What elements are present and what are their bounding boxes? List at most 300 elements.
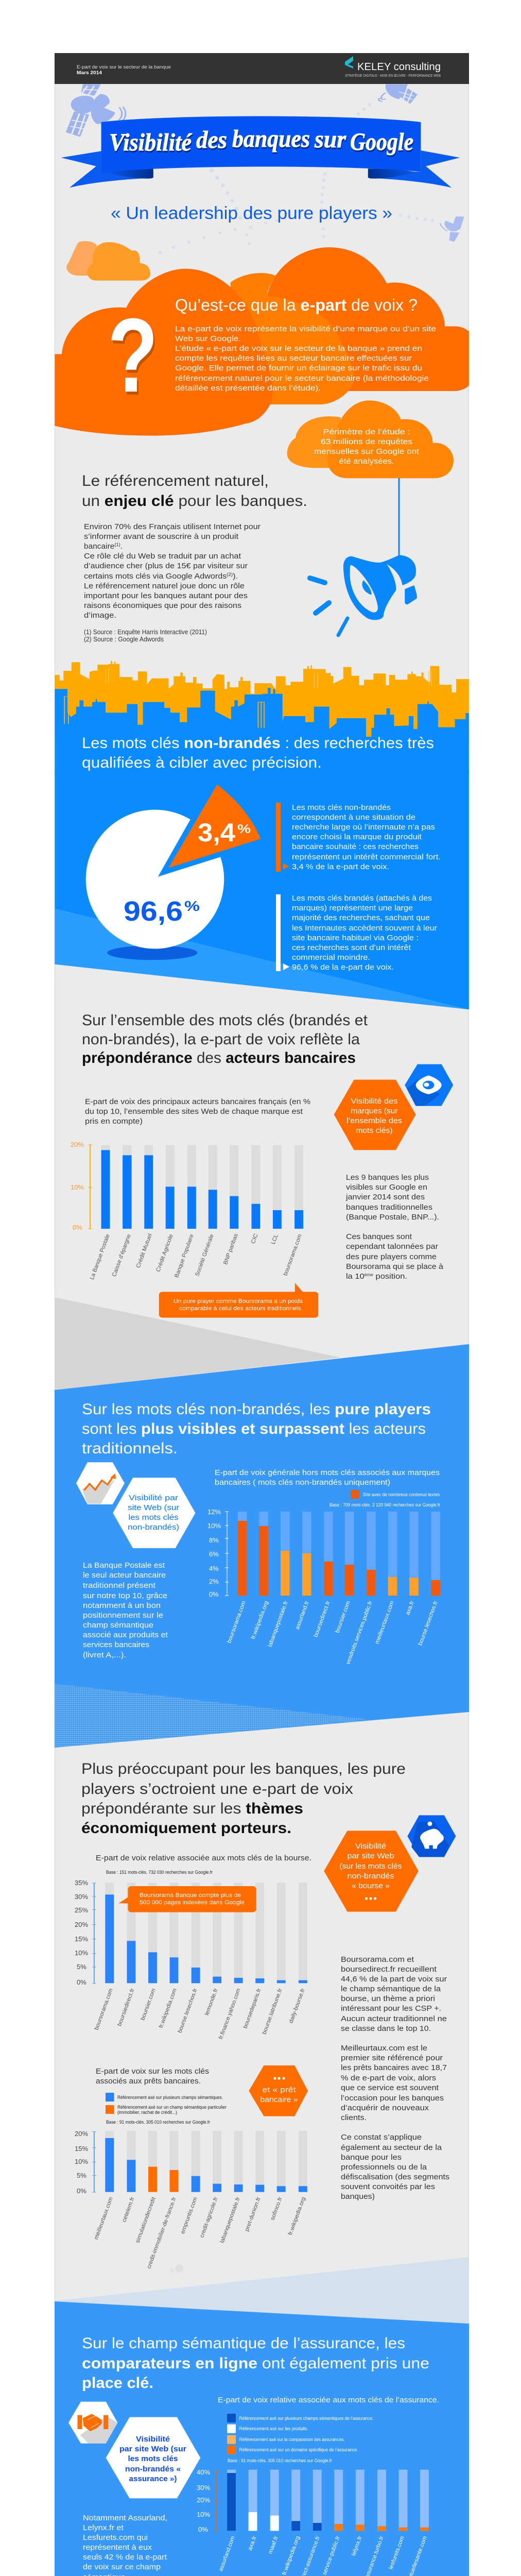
chart 5 legend: Référencement axé sur un domaine spécifique de l’assurance. [239, 2447, 358, 2453]
note: non-brandés [276, 803, 441, 872]
scope cloud: mensuelles sur Google ont [314, 447, 420, 456]
text: Boursorama et Meilleurtaux: boursedirect.fr recueillent [341, 1965, 437, 1974]
bar chart: bourse: fr.finance.yahoo.com [218, 1988, 242, 2040]
text: 9 banques: la 10 [346, 1272, 363, 1281]
chart 2 description: E-part de voix générale hors mots clés associés aux marques [215, 1468, 440, 1477]
bar chart: assurance: 10% [197, 2511, 210, 2518]
text: référencement naturel: ). [233, 572, 238, 581]
chart 4 description and legend: Base : 91 mots-clés. 305 010 recherches sur Google.fr [106, 2120, 210, 2125]
chart 5 legend: Référencement axé sur plusieurs champs sémantiques de l’assurance. [239, 2416, 374, 2421]
blue background [55, 2301, 469, 2576]
note: non-brandés: représentent un intérêt commercial fort. [292, 853, 441, 861]
text: Boursorama et Meilleurtaux: intéressant pour les CSP +. [341, 2004, 441, 2013]
bar chart: assurance: maaf.fr [267, 2535, 280, 2555]
hexagon: visibilité assurance: non-brandés « [125, 2465, 181, 2473]
callout: pages indexées: Boursorama Banque compte plus de [140, 1892, 241, 1899]
text: 9 banques: banques traditionnelles [346, 1203, 432, 1212]
text: référencement naturel: Ce rôle clé du Web se traduit par un achat [84, 552, 241, 561]
text: Boursorama et Meilleurtaux: Boursorama.com et [341, 1955, 414, 1964]
title text: banques [232, 125, 310, 152]
Keley logo: KELEY consulting [357, 61, 441, 73]
Keley logo: STRATÉGIE DIGITALE - MISE EN ŒUVRE - PERFORMANCE WEB [345, 73, 441, 78]
bar chart: prêts bancaires: meilleurtaux.com [93, 2196, 114, 2241]
bar chart: acteurs bancaires [71, 1141, 303, 1280]
bar chart: bourse [75, 1879, 307, 2040]
bar chart: bourse: 30% [75, 1893, 88, 1901]
bar chart: bourse: 35% [75, 1879, 88, 1887]
city skyline [55, 661, 469, 774]
text: Boursorama et Meilleurtaux: se classe dans le top 10. [341, 2024, 431, 2033]
text: référencement naturel: . [120, 542, 123, 551]
hexagon: visibilité par site: les mots clés [129, 1513, 178, 1522]
text: Boursorama et Meilleurtaux: professionnels ou de la [341, 2163, 427, 2172]
hexagon: visibilité assurance: assurance ») [129, 2475, 177, 2483]
pie chart [86, 785, 260, 960]
bar chart: assurance: lesfurets.com [388, 2535, 406, 2570]
callout: pages indexées: 500 000 pages indexées dans Google [140, 1900, 245, 1906]
bar chart: bourse: daily-bourse.fr [288, 1988, 306, 2024]
cloud body text: compte les requêtes liées au secteur bancaire effectuées sur [175, 354, 412, 363]
cloud body text: détaillée est présentée dans l’étude). [175, 384, 321, 393]
note: non-brandés: encore choisi la marque du produit [292, 833, 422, 841]
ribbon tails [61, 150, 460, 188]
bar chart: prêts bancaires: empruntis.com [180, 2196, 199, 2235]
bar chart: bourse: boursedeparis.fr [242, 1988, 263, 2029]
heading: prépondérance des acteurs bancaires: non-brandés), la e-part de voix reflète la [82, 1031, 360, 1048]
chart 2 legend: Base : 709 mots-clés. 2 120 940 recherches sur Google.fr [329, 1502, 440, 1508]
chart 4 description and legend: E-part de voix sur les mots clés [96, 2067, 209, 2076]
text: Assurland: Lelynx.fr et [83, 2523, 124, 2532]
cloud back lobes [55, 247, 469, 436]
text: La Banque Postale: sur notre top 10, grâce [83, 1591, 167, 1600]
text: La Banque Postale: (livret A,...). [83, 1651, 126, 1659]
heading: thèmes économiquement porteurs: prépondérante sur les thèmes [81, 1800, 303, 1817]
hexagon: visibilité par site: non-brandés) [128, 1523, 179, 1532]
text: La Banque Postale: La Banque Postale est [83, 1561, 165, 1570]
title text: des [196, 126, 227, 154]
bar chart: acteurs bancaires: Société Générale [194, 1233, 215, 1277]
cloud heading: Qu’est-ce que la e-part de voix ? [175, 296, 418, 314]
text: Boursorama et Meilleurtaux: l’occasion pour les banques [341, 2094, 444, 2103]
bar chart: prêts bancaires: cetelem.fr [121, 2196, 136, 2223]
slice label 3,4% [198, 818, 251, 847]
text: référencement naturel [84, 522, 260, 643]
bar chart: bourse: fr.wikipedia.com [158, 1988, 178, 2029]
chart 4 description and legend: (immobilier, rachat de crédit...) [117, 2110, 177, 2115]
bar chart: prêts bancaires: sofinco.fr [269, 2196, 284, 2221]
text: Boursorama et Meilleurtaux: les prêts bancaires avec 18,7 [341, 2063, 447, 2072]
chart 1 description [85, 1097, 310, 1126]
bar chart: acteurs bancaires: Banque Populaire [173, 1233, 195, 1279]
text: 9 banques: janvier 2014 sont des [345, 1193, 425, 1201]
bar chart: assurance: 40% [197, 2468, 210, 2476]
bar chart: prêts bancaires: labanquepostale.fr [219, 2196, 241, 2244]
icon: eye hexagon [405, 1064, 453, 1106]
title text: Visibilité [109, 129, 193, 156]
bar chart: e-part non-brandés: axa.fr [405, 1600, 415, 1616]
text: 9 banques: cependant talonnées par [346, 1242, 438, 1251]
text: Boursorama et Meilleurtaux: également au secteur de la [341, 2143, 442, 2152]
text: référencement naturel: bancaire [84, 542, 114, 551]
icon: handshake hexagon [68, 2402, 117, 2444]
text: 9 banques: (Banque Postale, BNP...). [346, 1213, 439, 1222]
note: brandés: marques) représentent une large [292, 904, 413, 912]
bar chart: assurance: 0% [198, 2526, 208, 2533]
note: brandés: site bancaire habituel via Google : [292, 934, 419, 942]
hexagon: visibilité assurance [106, 2417, 200, 2498]
section heading [82, 2335, 429, 2392]
hexagon: prêt bancaire [249, 2065, 308, 2116]
icon: growth hexagon [76, 1462, 125, 1504]
hexagon: prêt bancaire: bancaire » [260, 2095, 298, 2104]
blue background [55, 771, 469, 1009]
icon: satellite right [440, 216, 464, 242]
bar chart: e-part non-brandés [207, 1508, 440, 1665]
section heading: traditionnels. [82, 1440, 178, 1457]
bar chart: e-part non-brandés: 8% [209, 1536, 219, 1544]
text: Boursorama et Meilleurtaux: souvent convoités par les [341, 2182, 435, 2191]
bar chart: acteurs bancaires: 0% [73, 1224, 82, 1231]
text: 9 banques: des pure players comme [346, 1252, 437, 1261]
hexagon: visibilité par site [113, 1478, 195, 1548]
text: référencement naturel: raisons économiques que pour des raisons [84, 601, 241, 610]
header bar [55, 53, 469, 84]
bar chart: e-part non-brandés: 10% [207, 1522, 221, 1530]
hexagon: visibilité des marques [334, 1080, 416, 1150]
text: référencement naturel: Le référencement naturel joue donc un rôle [84, 582, 245, 590]
scope cloud: été analysées. [339, 457, 394, 466]
hexagon: visibilité bourse [324, 1831, 419, 1912]
chart 2 description: bancaires ( mots clés non-brandés uniquement) [215, 1478, 390, 1487]
bar chart: e-part non-brandés: 6% [209, 1550, 219, 1558]
heading: référencement naturel [82, 472, 307, 510]
hexagon: visibilité des marques: Visibilité des [351, 1097, 397, 1106]
hexagon: visibilité bourse: Visibilité [355, 1842, 386, 1851]
hexagon: visibilité des marques: marques (sur [351, 1107, 398, 1115]
hexagon: visibilité assurance: par site Web (sur [119, 2445, 186, 2453]
slice label 96,6%: 96,6 [124, 896, 183, 927]
hexagon: visibilité par site: Visibilité par [129, 1494, 178, 1502]
hexagon: visibilité assurance: les mots clés [128, 2454, 178, 2463]
hexagon: visibilité des marques: l’ensemble des [346, 1116, 402, 1125]
note: non-brandés: 3,4 % de la e-part de voix. [292, 862, 389, 871]
text: 9 banques: visibles sur Google en [346, 1183, 427, 1192]
text: Boursorama et Meilleurtaux: premier site référencé pour [341, 2054, 443, 2062]
bar chart: assurance: lelynx.fr [351, 2535, 363, 2557]
slice label 96,6%: % [184, 898, 200, 914]
text: Assurland: Lesfurets.com qui [83, 2533, 148, 2542]
bar chart: bourse: boursorama.com [93, 1988, 114, 2031]
bar chart: e-part non-brandés: fr.wikipedia.org [250, 1600, 270, 1640]
ribbon band [101, 116, 421, 173]
text: La Banque Postale: champ sémantique [83, 1621, 153, 1630]
heading: référencement naturel: un enjeu clé pour les banques. [82, 493, 307, 510]
bar chart: bourse: bourse.lesechos.fr [177, 1988, 199, 2034]
text: Boursorama et Meilleurtaux [341, 1955, 449, 2201]
text: référencement naturel: d’image. [84, 611, 116, 620]
pale blue transition [55, 2257, 469, 2324]
icon: question mark: ? [108, 297, 158, 414]
scope cloud: 63 millions de requêtes [321, 437, 412, 446]
chart 4 description and legend [96, 2067, 227, 2125]
scope cloud: Périmètre de l’étude : [323, 428, 410, 436]
icon: piggy bank hexagon [407, 1815, 456, 1857]
note: brandés: les Internautes accèdent souvent à leur [292, 924, 437, 933]
chart 5 description: E-part de voix relative associée aux mots clés de l’assurance. [218, 2396, 439, 2404]
bar chart: bourse: boursier.com [140, 1988, 157, 2021]
bar chart: bourse: bourse.latribune.fr [261, 1988, 284, 2035]
bar chart: prêts bancaires: credit-immobilier-de-france.fr [146, 2196, 178, 2269]
small background clouds [66, 241, 150, 281]
bar chart: assurance: assurland.com [218, 2535, 236, 2572]
bar chart: bourse: 25% [75, 1906, 88, 1914]
chart 2 legend: Site avec de nombreux contenus textes [363, 1492, 440, 1498]
chart 2 description [215, 1468, 440, 1487]
text: Boursorama et Meilleurtaux: Ce constat s’applique [341, 2133, 422, 2142]
text: référencement naturel: Environ 70% des Français utilisent Internet pour [84, 522, 260, 531]
text: La Banque Postale: positionnement sur le [83, 1611, 163, 1620]
chart 1 description: du top 10, l’ensemble des sites Web de chaque marque est [85, 1107, 303, 1116]
heading: thèmes économiquement porteurs: économiquement porteurs. [81, 1820, 291, 1837]
text: 9 banques [345, 1173, 444, 1281]
chart 5 legend [227, 2414, 374, 2464]
callout: Boursorama: comparable à celui des acteurs traditionnels. [179, 1306, 303, 1312]
text: Boursorama et Meilleurtaux: que ce service est souvent [341, 2083, 439, 2092]
bar chart: acteurs bancaires: CIC [250, 1233, 259, 1245]
text: Boursorama et Meilleurtaux: 44,6 % de la part de voix sur [341, 1975, 447, 1984]
callout: Boursorama: Un pure player comme Boursorama a un poids [173, 1298, 303, 1304]
header study label: Mars 2014 [77, 70, 102, 76]
section heading: Les mots clés non-brandés : des recherches très [82, 735, 434, 752]
chart 3 description: Base : 151 mots-clés. 732 030 recherches sur Google.fr [106, 1870, 213, 1875]
bar chart: assurance: axa.fr [247, 2535, 258, 2551]
bar chart: prêts bancaires: 0% [77, 2187, 86, 2195]
text: Assurland: représentent à eux [83, 2543, 152, 2552]
slice label 3,4%: 3,4 [198, 818, 235, 847]
bar chart: bourse: 0% [77, 1978, 86, 1986]
heading: prépondérance des acteurs bancaires [82, 1012, 368, 1066]
bar chart: acteurs bancaires: Crédit Agricole [155, 1233, 175, 1273]
subtitle: « Un leadership des pure players » [111, 204, 392, 223]
text: référencement naturel: certains mots clés via Google Adwords [84, 572, 217, 581]
cloud body text [175, 325, 436, 393]
title text: sur [314, 126, 346, 153]
bar chart: assurance: 30% [197, 2484, 210, 2492]
cloud body text: La e-part de voix représente la visibilité d’une marque ou d’un site [175, 325, 436, 333]
text: 9 banques: ème [364, 1273, 374, 1277]
text: Boursorama et Meilleurtaux: d’acquérir de nouveaux [341, 2104, 429, 2112]
chart 1 description: E-part de voix des principaux acteurs bancaires français (en % [85, 1097, 310, 1106]
text: référencement naturel: important pour les banques autant pour des [84, 591, 248, 600]
section: assurance [55, 2301, 469, 2576]
section: pure players [55, 1344, 469, 1748]
e-part cloud [55, 247, 469, 436]
note: brandés: majorité des recherches, sachant que [292, 913, 430, 922]
bar chart: e-part non-brandés: boursier.com [334, 1600, 352, 1634]
text: 9 banques: position. [373, 1272, 407, 1281]
chart 1 description: pris en compte) [85, 1117, 143, 1126]
chart 4 description and legend: Référencement axé sur plusieurs champs sémantiques. [117, 2095, 223, 2100]
bar chart: e-part non-brandés: vosdroits.services.public.fr [345, 1600, 374, 1665]
section: mots clés non-brandés [55, 735, 469, 1009]
bar chart: bourse: 5% [77, 1963, 86, 1971]
bar chart: acteurs bancaires: Crédit Mutuel [135, 1233, 153, 1269]
chart 5 legend: Base : 91 mots-clés. 305 010 recherches sur Google.fr [228, 2458, 332, 2464]
hexagon: visibilité bourse: non-brandés [347, 1872, 394, 1880]
chart 5 legend: Référencement axé sur la comparaison des assurances. [239, 2437, 345, 2443]
text: Boursorama et Meilleurtaux: banques) [341, 2192, 375, 2201]
text: La Banque Postale [83, 1561, 168, 1659]
scope cloud [287, 400, 454, 478]
text: Assurland: de voix sur ce champ [83, 2563, 161, 2571]
section heading: Sur le champ sémantique de l’assurance, les [82, 2335, 405, 2352]
Keley logo [345, 56, 441, 78]
hexagon: visibilité bourse: « bourse » [352, 1882, 390, 1890]
note: brandés [276, 894, 437, 972]
hexagon: visibilité bourse: (sur les mots clés [340, 1862, 402, 1871]
text: La Banque Postale: associé aux produits et [83, 1631, 168, 1639]
dotted satellite links [159, 103, 434, 254]
bar chart: acteurs bancaires: Caisse d’épargne [111, 1233, 132, 1278]
heading: thèmes économiquement porteurs: players s’octroient une e-part de voix [81, 1781, 353, 1798]
heading: thèmes économiquement porteurs [81, 1760, 406, 1837]
bar chart: e-part non-brandés: 0% [209, 1590, 219, 1598]
text: Assurland: seuls 42 % de la e-part [83, 2553, 167, 2562]
bar chart: e-part non-brandés: meilleurtaux.com [374, 1600, 395, 1645]
text: Boursorama et Meilleurtaux: clients. [341, 2113, 367, 2122]
bar chart: prêts bancaires: 20% [75, 2130, 88, 2138]
bar chart: e-part non-brandés: boursorama.com [226, 1600, 247, 1644]
bar chart: e-part non-brandés: 2% [209, 1578, 219, 1585]
callout: Boursorama [159, 1283, 318, 1318]
note: brandés: ces recherches sont d’un intérêt [292, 943, 411, 952]
bar chart: prêts bancaires: 15% [75, 2145, 88, 2153]
bar chart: acteurs bancaires: 10% [71, 1183, 84, 1191]
heading: référencement naturel: Le référencement naturel, [82, 472, 269, 489]
note: brandés: commercial moindre. [292, 953, 370, 962]
hexagon: prêt bancaire: et « prêt [263, 2086, 296, 2094]
header study label [77, 64, 171, 76]
note: non-brandés: Les mots clés non-brandés [292, 803, 391, 812]
text: La Banque Postale: services bancaires [83, 1640, 149, 1649]
cloud main lobe [55, 269, 273, 436]
bar chart: e-part non-brandés: 12% [207, 1508, 221, 1516]
bar chart: bourse: 15% [75, 1935, 88, 1943]
text: La Banque Postale: traditionnel présent [83, 1581, 156, 1590]
chart 4 description and legend: associés aux prêts bancaires. [96, 2077, 201, 2086]
text: 9 banques: Boursorama qui se place à [346, 1262, 444, 1271]
bar chart: bourse: lemonde.fr [204, 1988, 219, 2016]
bar chart: e-part non-brandés: labanquepostale.fr [267, 1600, 289, 1648]
text: Assurland [83, 2514, 167, 2576]
text: Boursorama et Meilleurtaux: Aucun acteur traditionnel ne [341, 2014, 447, 2023]
bar chart: assurance [197, 2468, 429, 2576]
bar chart: prêts bancaires: fr.wikipedia.org [287, 2196, 307, 2236]
section heading: Sur les mots clés non-brandés, les pure players [82, 1401, 431, 1418]
heading: prépondérance des acteurs bancaires: prépondérance des acteurs bancaires [82, 1049, 356, 1066]
cloud body text: Web sur Google. [175, 334, 241, 343]
bar chart: acteurs bancaires: BNP paribas [222, 1232, 239, 1265]
callout: pages indexées [118, 1886, 256, 1912]
bar chart: prêts bancaires: 5% [77, 2172, 86, 2179]
bar chart: assurance: 20% [197, 2496, 210, 2504]
title ribbon [61, 116, 460, 188]
section heading: qualifiées à cibler avec précision. [82, 754, 322, 771]
text: Boursorama et Meilleurtaux: le champ sémantique de la [341, 1985, 441, 1993]
cloud body text: référencement naturel pour le secteur bancaire (la méthodologie [175, 374, 429, 383]
text: référencement naturel: (1) [114, 542, 120, 547]
section heading: sont les plus visibles et surpassent les acteurs [82, 1420, 426, 1437]
bar chart: bourse: boursiedirect.fr [116, 1988, 136, 2027]
chart 3 description: E-part de voix relative associée aux mots clés de la bourse. [96, 1854, 311, 1862]
bar chart: e-part non-brandés: assurland.fr [294, 1600, 310, 1631]
note: brandés: Les mots clés brandés (attachés à des [292, 894, 432, 903]
icon: satellite top right [378, 84, 418, 104]
grey transition triangle [55, 1297, 341, 1390]
cloud body text: L’étude « e-part de voix sur le secteur de la banque » prend en [175, 344, 422, 353]
hexagon: visibilité assurance: Visibilité [136, 2435, 170, 2444]
text: La Banque Postale: le seul acteur bancaire [83, 1571, 166, 1580]
bar chart: e-part non-brandés: bourse.lesechos.fr [417, 1600, 439, 1647]
bar chart: acteurs bancaires: LCL [270, 1233, 280, 1245]
heading: prépondérance des acteurs bancaires: Sur l’ensemble des mots clés (brandés et [82, 1012, 368, 1029]
hexagon: visibilité bourse: par site Web [347, 1852, 394, 1860]
hexagon: visibilité des marques: mots clés) [356, 1126, 393, 1135]
chart 3 description [96, 1854, 311, 1875]
bar chart: prêts bancaires: simulationdecredit [134, 2196, 157, 2244]
text: référencement naturel: s’informer avant de souscrire à un produit [84, 532, 239, 541]
text: Boursorama et Meilleurtaux: défiscalisation (des segments [341, 2173, 449, 2181]
text: Assurland: Notamment Assurland, [83, 2514, 167, 2522]
section heading: place clé. [82, 2375, 153, 2392]
text: Boursorama et Meilleurtaux: Meilleurtaux.com est le [341, 2044, 427, 2053]
note: non-brandés: bancaire souhaité : ces recherches [292, 842, 419, 851]
icon: satellite top left [66, 84, 126, 137]
bar chart: bourse: 20% [75, 1921, 88, 1928]
title text [109, 125, 413, 156]
text: référencement naturel: (2) Source : Google Adwords [84, 636, 164, 643]
text: référencement naturel: d’audience cher (plus de 15€ par visiteur sur [84, 562, 248, 570]
text: 9 banques: Ces banques sont [346, 1232, 412, 1241]
chart 4 description and legend: Référencement axé sur un champ sémantique particulier [117, 2105, 227, 2110]
note: non-brandés: recherche large où l’internaute n’a pas [292, 823, 435, 832]
cloud body text: Google. Elle permet de fournir un éclairage sur le trafic issu du [175, 364, 422, 372]
text: La Banque Postale: notamment à un bon [83, 1601, 161, 1610]
text: Boursorama et Meilleurtaux: banque pour les [341, 2153, 402, 2162]
bar chart: bourse: 10% [75, 1949, 88, 1957]
bar chart: prêts bancaires: pret-dunion.fr [244, 2196, 262, 2232]
header study label: E-part de voix sur le secteur de la banque [77, 64, 171, 70]
note: non-brandés: correspondent à une situation de [292, 813, 415, 822]
heading: thèmes économiquement porteurs: Plus préoccupant pour les banques, les pure [81, 1760, 406, 1777]
icon: megaphone [310, 478, 417, 635]
hexagon: visibilité par site: site Web (sur [128, 1503, 179, 1512]
bar chart: prêts bancaires: 10% [75, 2158, 88, 2165]
bar chart: e-part non-brandés: boursedirect.fr [312, 1600, 332, 1638]
slice label 3,4%: % [237, 822, 251, 836]
bar chart: acteurs bancaires: 20% [71, 1141, 84, 1148]
bar chart: assurance: fr.wikipedia.org [281, 2535, 301, 2576]
title text: Google [350, 128, 413, 156]
bar chart: acteurs bancaires: boursorama.com [282, 1233, 303, 1277]
chart 2 legend [329, 1490, 440, 1508]
bar chart: e-part non-brandés: 4% [209, 1565, 219, 1572]
section heading [82, 735, 434, 771]
text: 9 banques: Les 9 banques les plus [346, 1173, 429, 1182]
text: Boursorama et Meilleurtaux: bourse, un thème a priori [341, 1994, 435, 2003]
bar chart: prêts bancaires [75, 2130, 307, 2269]
bar chart: prêts bancaires: credit-agricole.fr [199, 2196, 219, 2239]
